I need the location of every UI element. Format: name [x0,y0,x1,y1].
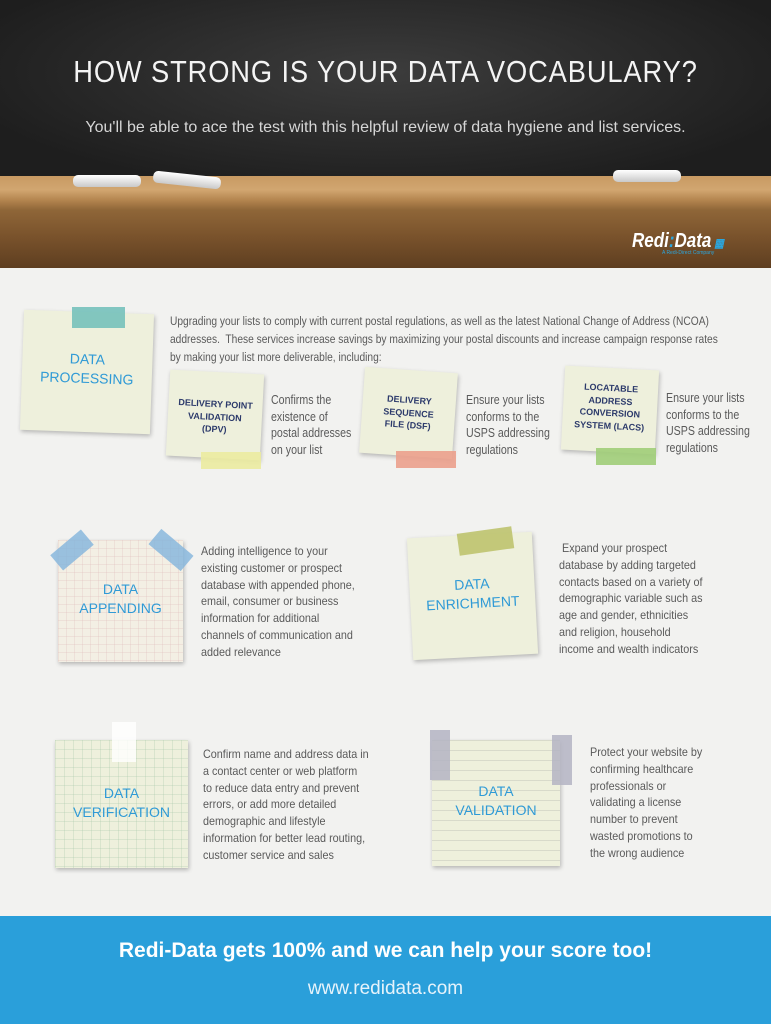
small note: DSF: SEQUENCE [383,406,434,419]
logo: A Redi-Direct Company [662,250,714,256]
text: data validation [590,745,702,860]
note: data processing: PROCESSING [40,368,134,388]
small note: DPV: DELIVERY POINT [178,397,253,411]
text: DPV: existence of [271,410,328,424]
text: data enrichment: income and wealth indicators [559,642,698,656]
text: data appending: database with appended phone, [201,578,355,592]
small note: LACS [561,366,659,454]
note: data validation [432,740,560,866]
text: LACS: USPS addressing [666,424,750,438]
small note: DPV: (DPV) [202,424,227,435]
footer url: www.redidata.com [308,978,463,999]
text: data appending: existing customer or prospect [201,561,342,575]
text: data enrichment: contacts based on a variety of [559,575,702,589]
panel: data validation [430,730,702,870]
text: data enrichment: and religion, household [559,625,671,639]
note: data verification [55,740,188,868]
text: data enrichment: Expand your prospect [562,541,667,555]
text: data verification: information for better lead routing, [203,831,365,845]
chalkboard background [0,0,771,180]
footer headline: Redi-Data gets 100% and we can help your score too! [119,939,652,962]
note: data verification: VERIFICATION [73,804,170,820]
note: data verification: DATA [104,785,139,801]
text: data appending: channels of communication and [201,628,353,642]
note: data appending [58,540,183,662]
text: data appending: added relevance [201,645,281,659]
text: DPV [271,393,351,456]
text: LACS: regulations [666,440,718,454]
text: data enrichment [559,541,702,656]
text: data verification: customer service and sales [203,848,334,862]
text: data verification: demographic and lifestyle [203,814,325,828]
note: data validation: VALIDATION [455,802,537,818]
note: data appending: APPENDING [79,600,162,616]
panel: data verification [54,722,369,872]
small note: LACS: SYSTEM (LACS) [574,419,644,433]
title: HOW STRONG IS YOUR DATA VOCABULARY? [73,54,698,89]
text: data appending: email, consumer or business [201,594,338,608]
intro paragraph: addresses. These services increase savings by maximizing your postal discounts and increase campaign response rates [170,332,718,346]
text: data enrichment: age and gender, ethnicities [559,608,688,622]
text: data enrichment: database by adding targeted [559,558,696,572]
text: data appending: information for additional [201,611,319,625]
text: DPV: Confirms the [271,393,331,407]
panel: data processing [18,307,750,469]
small note: DSF: FILE (DSF) [384,419,431,432]
text: data verification: Confirm name and address data in [203,747,369,761]
small note: LACS: CONVERSION [579,407,640,420]
text: data validation: Protect your website by [590,745,702,759]
intro paragraph: Upgrading your lists to comply with current postal regulations, as well as the latest National Change of Address (NCOA) [170,314,709,328]
text: LACS [666,391,750,454]
text: DPV: postal addresses [271,426,351,440]
small note: DPV [166,370,264,460]
text: DSF: Ensure your lists [466,393,545,407]
footer [0,916,771,1024]
logo: Redi:Data ▦ [632,230,724,252]
note: data processing [20,310,154,434]
text: data appending: Adding intelligence to your [201,544,328,558]
text: data verification: errors, or add more detailed [203,797,336,811]
text: data validation: the wrong audience [590,846,684,860]
text: data validation: professionals or [590,779,666,793]
intro paragraph [170,314,718,364]
small note: DSF: DELIVERY [387,393,432,407]
text: LACS: Ensure your lists [666,391,745,405]
panel: data enrichment [406,526,702,664]
text: data validation: number to prevent [590,812,678,826]
text: data appending [201,544,355,659]
text: data validation: validating a license [590,795,681,809]
note: data enrichment: ENRICHMENT [426,592,520,613]
chalk pieces [73,175,141,187]
text: DPV: on your list [271,442,322,456]
text: DSF: regulations [466,442,518,456]
text: data validation: wasted promotions to [590,829,693,843]
small note: LACS: LOCATABLE [584,382,638,394]
text: data verification: a contact center or web platform [203,764,357,778]
text: data verification [203,747,369,862]
tape teal [72,307,125,328]
small note: DSF [359,367,458,459]
small note: LACS: ADDRESS [588,394,633,407]
text: DSF: USPS addressing [466,426,550,440]
note: data processing: DATA [70,350,105,368]
small note: DPV: VALIDATION [188,410,242,423]
text: data enrichment: demographic variable such as [559,591,702,605]
text: LACS: conforms to the [666,408,739,422]
subtitle: You'll be able to ace the test with this helpful review of data hygiene and list services. [85,119,686,136]
panel: data appending [50,529,355,666]
text: DSF: conforms to the [466,410,539,424]
note: data enrichment [407,532,538,660]
intro paragraph: by making your list more deliverable, including: [170,350,382,364]
text: data verification: to reduce data entry and prevent [203,781,359,795]
wooden ledge [0,176,771,268]
note: data appending: DATA [103,581,138,597]
text: DSF [466,393,550,456]
note: data validation: DATA [478,783,514,799]
note: data enrichment: DATA [454,575,490,593]
header: chalkboard [0,0,771,268]
text: data validation: confirming healthcare [590,762,693,776]
